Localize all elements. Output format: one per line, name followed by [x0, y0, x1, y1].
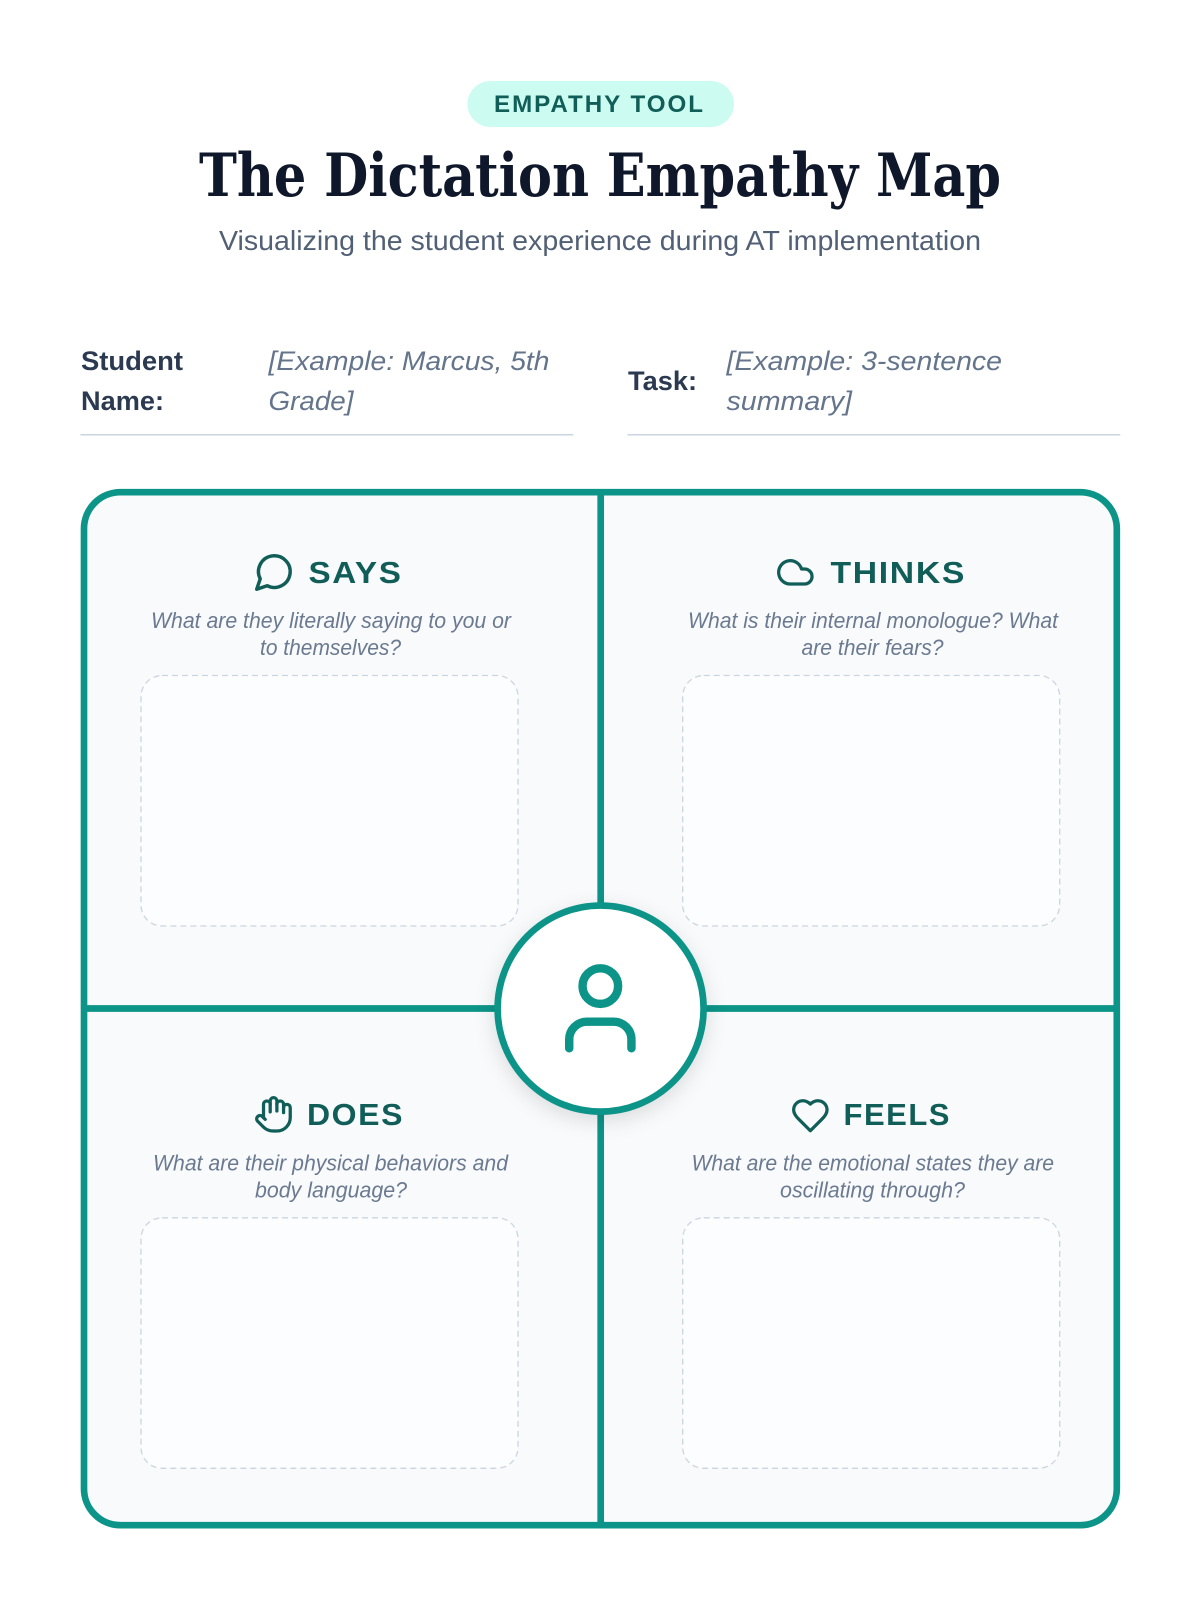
prompt: thinks: What is their internal monologue? What [688, 608, 1059, 633]
panel: does [141, 1098, 518, 1468]
prompt: says [151, 608, 513, 660]
prompt: says: What are they literally saying to you or [151, 608, 513, 633]
field: student name: Grade] [268, 386, 355, 416]
header [199, 81, 1001, 256]
field: task: [Example: 3-sentence [725, 346, 1002, 376]
prompt: thinks [688, 608, 1059, 660]
panel: says [141, 556, 518, 926]
heading: thinks: THINKS [830, 556, 966, 590]
prompt: feels: oscillating through? [780, 1178, 966, 1202]
writing box: does [141, 1218, 518, 1468]
empathy map frame [84, 492, 1117, 1525]
prompt: does: body language? [255, 1178, 408, 1202]
prompt: feels: What are the emotional states they are [692, 1150, 1054, 1176]
field: student name: Student [81, 346, 183, 376]
field: task: Task: [628, 366, 697, 396]
badge: empathy tool [468, 81, 734, 127]
prompt: feels [692, 1150, 1054, 1202]
field: task: summary] [726, 386, 854, 416]
icon: cloud [779, 561, 812, 584]
field: student name [80, 346, 573, 436]
prompt: does: What are their physical behaviors and [153, 1150, 509, 1176]
quadrant dividers [84, 492, 1116, 1525]
icon: person [569, 968, 631, 1048]
title: The Dictation Empathy Map [199, 141, 1001, 211]
icon: heart [794, 1101, 827, 1131]
center hub: student [498, 906, 704, 1112]
prompt: says: to themselves? [260, 635, 402, 660]
panel: feels [683, 1098, 1060, 1468]
panel: thinks [683, 556, 1060, 926]
icon: speech bubble [257, 556, 290, 589]
subtitle: Visualizing the student experience during AT implementation [219, 225, 981, 256]
writing box: thinks [683, 676, 1060, 926]
prompt: thinks: are their fears? [802, 635, 944, 660]
prompt: does [153, 1150, 509, 1202]
writing box: feels [683, 1218, 1060, 1468]
field: student name: [Example: Marcus, 5th [267, 346, 550, 376]
heading: does: DOES [307, 1098, 404, 1132]
writing box: says [141, 676, 518, 926]
field: task [628, 346, 1120, 436]
badge: empathy tool: EMPATHY TOOL [494, 91, 705, 118]
field: student name: Name: [81, 386, 164, 416]
icon: hand [257, 1098, 290, 1131]
heading: feels: FEELS [844, 1098, 951, 1132]
heading: says: SAYS [308, 556, 402, 590]
